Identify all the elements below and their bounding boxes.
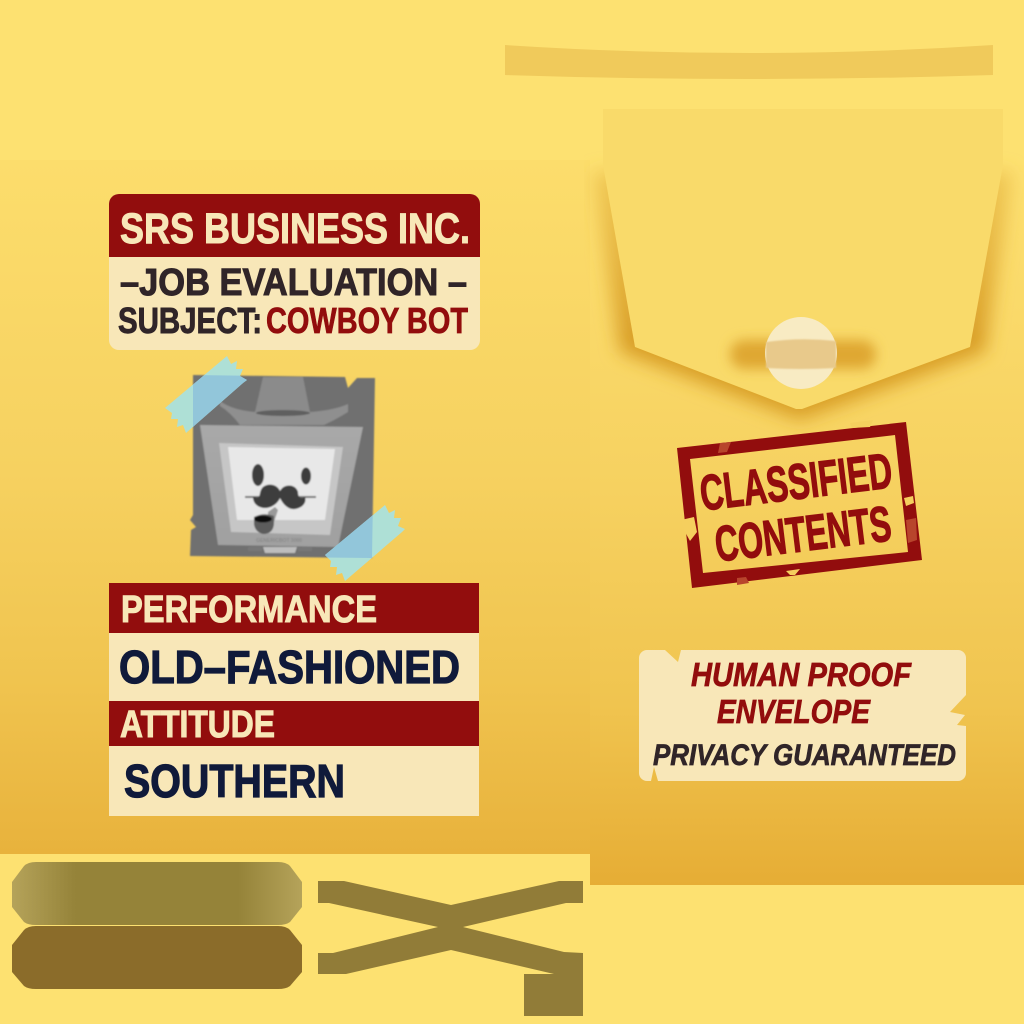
robot eyes — [252, 464, 311, 486]
job evaluation heading: –JOB EVALUATION – — [120, 262, 467, 304]
attitude label: ATTITUDE — [120, 704, 275, 746]
flap — [603, 109, 1003, 409]
stamp line one: CLASSIFIED — [697, 442, 895, 522]
classified stamp — [677, 420, 922, 588]
top glue strip — [505, 45, 993, 79]
hat band shadow — [256, 410, 310, 416]
monitor bezel — [219, 443, 343, 535]
robot moustache — [245, 485, 316, 509]
taped photo of robot — [165, 356, 405, 581]
header card — [109, 194, 480, 350]
monitor body — [200, 425, 363, 547]
evaluation table — [109, 583, 479, 816]
stamp nicks — [681, 420, 914, 575]
monitor screen — [228, 447, 335, 520]
performance value: OLD–FASHIONED — [119, 641, 460, 693]
monitor brand label: GENERICBOT 3000 — [256, 538, 302, 544]
envelope flap with seal — [590, 168, 1016, 430]
tape bottom right — [325, 505, 405, 581]
robot pipe — [254, 507, 278, 534]
seal sticker — [765, 317, 837, 389]
bottom flap template top bar — [12, 862, 302, 925]
stamp wear marks — [718, 442, 917, 585]
performance label: PERFORMANCE — [121, 589, 377, 631]
subject label: SUBJECT: — [118, 300, 262, 341]
subject value: COWBOY BOT — [266, 300, 468, 341]
stamp line two: CONTENTS — [712, 495, 894, 573]
human proof note — [639, 650, 966, 781]
cowboy hat brim — [220, 401, 348, 425]
torn note paper — [639, 650, 966, 781]
photo base — [190, 375, 375, 558]
attitude value: SOUTHERN — [124, 755, 345, 807]
crossed strap template — [318, 881, 583, 1016]
attitude band — [109, 701, 479, 746]
note heading line one: HUMAN PROOF — [691, 656, 912, 693]
company name: SRS BUSINESS INC. — [120, 205, 470, 253]
robot photo — [190, 375, 375, 558]
tape top left — [165, 356, 247, 433]
cowboy hat crown — [255, 377, 310, 412]
right envelope front panel — [590, 165, 1024, 885]
note subtext: PRIVACY GUARANTEED — [653, 739, 956, 772]
performance band — [109, 583, 479, 633]
note heading line two: ENVELOPE — [717, 693, 871, 730]
left envelope back panel — [0, 160, 590, 854]
stamp border — [677, 422, 922, 588]
bottom flap template lower bar — [12, 926, 302, 989]
monitor base — [248, 547, 312, 553]
flap shadow — [593, 172, 1012, 420]
header red band — [109, 194, 480, 257]
seal shadow band — [730, 340, 876, 369]
